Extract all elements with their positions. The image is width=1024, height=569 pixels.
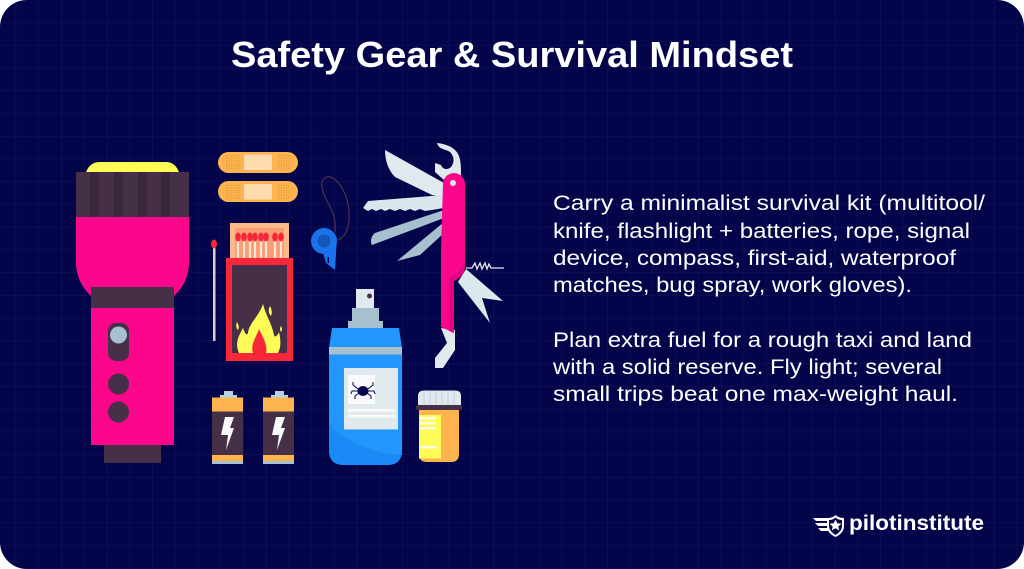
icon: matchbox [226,223,293,361]
text block: kit [553,192,985,297]
text block: fuel: with a solid reserve. Fly light; several [552,356,942,379]
icon: spray bottle [329,289,402,465]
text block: kit: Carry a minimalist survival kit (multitool/ [553,192,985,215]
icon: whistle [311,177,349,270]
icon: batteries [212,391,294,464]
icon: bandages [218,152,298,202]
text block: fuel [552,329,972,406]
icon: multitool knife [363,143,504,368]
icon: single match [211,240,217,341]
text block: fuel: Plan extra fuel for a rough taxi and land [553,329,972,352]
title: Safety Gear & Survival Mindset [231,34,793,75]
text block: kit: device, compass, first-aid, waterproof [553,247,956,270]
text block: kit: matches, bug spray, work gloves). [553,274,912,297]
text block: kit: knife, flashlight + batteries, rope, signal [553,220,970,243]
logo: pilot institute [813,512,984,537]
icon: pill bottle [416,390,462,462]
icon: flashlight [76,162,189,463]
logo: pilot institute: pilotinstitute [849,512,984,535]
text block: fuel: small trips beat one max-weight haul. [553,383,958,406]
